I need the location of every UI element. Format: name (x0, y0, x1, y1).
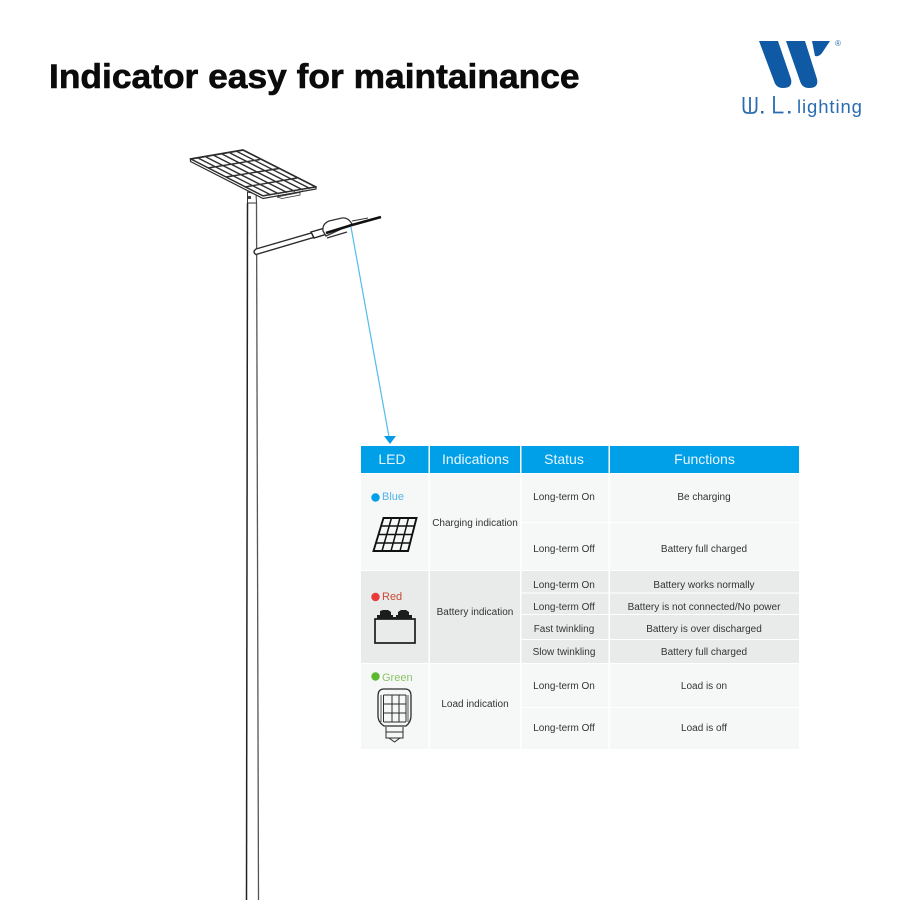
lamp arm (254, 228, 327, 254)
row: red battery indication: Battery works normally (653, 580, 755, 591)
row: blue charging indication: Long-term On (533, 492, 595, 503)
row: green load indication (361, 664, 799, 749)
row: green load indication: Long-term On (533, 681, 595, 692)
table header: Functions (674, 451, 735, 467)
row: red battery indication: Battery indication (437, 607, 513, 618)
row: red battery indication: Long-term On (533, 580, 595, 591)
table (361, 446, 799, 749)
street lamp illustration (190, 150, 381, 900)
table header (361, 446, 799, 473)
lamp head (323, 217, 381, 238)
arrow (351, 227, 396, 444)
row: red battery indication: Slow twinkling (533, 647, 595, 658)
table header: Indications (442, 451, 509, 467)
logo: W. L. lighting: ® (835, 39, 841, 48)
row: red battery indication: Red (382, 591, 402, 603)
row: red battery indication: Battery full charged (661, 647, 747, 658)
row: green load indication: Load is on (681, 681, 727, 692)
icon: solar panel (374, 518, 416, 551)
row: blue charging indication: Charging indication (432, 518, 518, 529)
table header: Status (544, 451, 584, 467)
row: blue charging indication: Blue (382, 491, 404, 503)
row: blue charging indication (361, 474, 799, 570)
icon: lamp (378, 689, 411, 742)
pole (246, 192, 258, 900)
title: Indicator easy for maintainance (49, 58, 580, 96)
row: blue charging indication: Battery full charged (661, 544, 747, 555)
table header: LED (378, 451, 406, 467)
icon: battery (375, 610, 415, 643)
logo: W. L. lighting (744, 39, 863, 117)
row: blue charging indication: Long-term Off (533, 544, 595, 555)
row: green load indication: Long-term Off (533, 723, 595, 734)
row: green load indication: Load indication (441, 699, 509, 710)
row: red battery indication: Battery is over discharged (646, 624, 762, 635)
row: red battery indication: Long-term Off (533, 602, 595, 613)
row: red battery indication: Battery is not connected/No power (628, 602, 781, 613)
row: red battery indication: Fast twinkling (534, 624, 594, 635)
row: green load indication: Load is off (681, 723, 727, 734)
row: green load indication: Green (382, 672, 413, 684)
solar panel (190, 150, 316, 198)
logo: W. L. lighting: lighting (797, 96, 863, 117)
row: blue charging indication: Be charging (677, 492, 731, 503)
row: red battery indication (361, 571, 799, 663)
